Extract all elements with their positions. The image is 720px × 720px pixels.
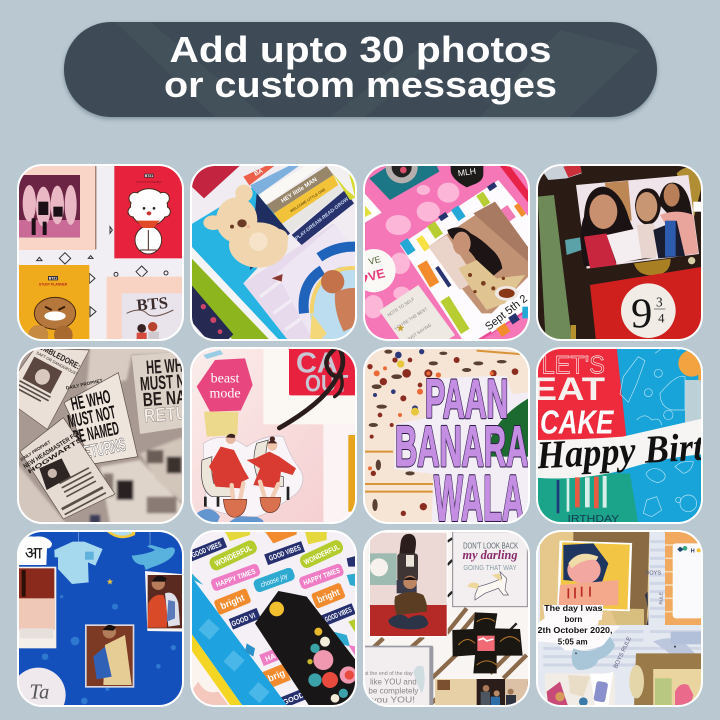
photo tile: Daily Prophet newspapers (17, 347, 184, 524)
title banner (62, 22, 659, 122)
photo tile: don't look back unicorn page: at the end of the day (365, 671, 413, 677)
photo tile: good vibes sticker sheet: brig (266, 668, 287, 684)
photo tile: teddy bear and baby stickers: WELCOME LITTLE ONE (289, 187, 327, 213)
photo tile: don't look back unicorn page: you YOU! (372, 694, 415, 704)
photo tile: Happy Birthday baby paper (536, 347, 703, 524)
photo tile: the day I was born page: born (564, 615, 582, 624)
photo tile: pink stickers with woman photo: ★ (396, 324, 405, 335)
photo tile: the day I was born page: RULE (659, 592, 664, 605)
photo tile: BTS planner stickers: BT21 (49, 277, 57, 281)
photo tile: Happy Birthday baby paper: LET'S (542, 351, 605, 379)
photo tile: teddy bear and baby stickers: BA (254, 168, 265, 178)
photo tile: Daily Prophet newspapers: DAILY PROPHET (19, 439, 52, 462)
photo tile: pink stickers with woman photo (363, 164, 530, 341)
photo tile: pink stickers with woman photo: VE (367, 254, 382, 267)
photo tile: beast mode sticker: mode (209, 386, 241, 401)
photo tile: Daily Prophet newspapers: MUST NOT (66, 401, 118, 432)
photo tile: good vibes sticker sheet: HAPPY TIMES (302, 566, 341, 587)
photo tile: don't look back unicorn page (363, 530, 530, 707)
photo tile: the day I was born page (536, 530, 703, 707)
photo tile: teddy bear and baby stickers: PLAY-DREAM-READ-GROW (294, 196, 350, 242)
photo tile: don't look back unicorn page: be completely (368, 685, 419, 695)
photo tile: Daily Prophet newspapers: HOGWARTS (27, 437, 84, 476)
photo tile: pink stickers with woman photo: NOTE TO SELF (386, 296, 416, 318)
photo tile: blue baby nursery page: Ta (29, 681, 49, 703)
photo tile: Daily Prophet newspapers: RETURNS (74, 433, 128, 464)
photo tile: Daily Prophet newspapers: DAILY PROPHET (65, 378, 103, 391)
photo tile: platform nine and three quarters (536, 164, 703, 341)
photo tile: platform nine and three quarters: 4 (658, 312, 665, 326)
photo tile: the day I was born page: 2th October 2020, (538, 626, 612, 635)
photo tile: Daily Prophet newspapers: HE WHO (69, 386, 112, 414)
photo tile: don't look back unicorn page: like YOU and (370, 676, 417, 686)
photo tile: Daily Prophet newspapers: NEW HEADMASTER FOR (22, 429, 83, 470)
photo tile: platform nine and three quarters: 9 (631, 290, 652, 337)
photo tile: the day I was born page: H (691, 548, 695, 554)
photo tile: good vibes sticker sheet (190, 530, 357, 707)
photo tile: teddy bear and baby stickers: HEY little MAN (280, 177, 319, 205)
photo tile: BTS planner stickers: BTS (136, 293, 169, 315)
photo tile: good vibes sticker sheet: choose joy (259, 571, 290, 589)
photo tile: pink stickers with woman photo: YOU'RE THE BEST (393, 306, 429, 331)
photo tile: beast mode sticker: OUT (305, 371, 349, 398)
photo tile: blue baby nursery page: ★ (106, 576, 114, 586)
title banner: or custom messages (164, 64, 557, 105)
photo tile: Daily Prophet newspapers: SAFT OR DANGEROUS? (35, 350, 79, 377)
photo tile: the day I was born page: BOYS RULE (613, 636, 633, 670)
photo tile: platform nine and three quarters: 3 (656, 295, 663, 310)
photo tile: good vibes sticker sheet: WONDERFUL (302, 542, 341, 567)
photo tile: the day I was born page: 5:05 am (558, 638, 588, 647)
photo tile: don't look back unicorn page: GOING THAT WAY (463, 563, 517, 572)
photo tile: teddy bear and baby stickers (190, 164, 357, 341)
photo tile: blue baby nursery page (17, 530, 184, 707)
photo tile: don't look back unicorn page: my darling (462, 548, 518, 562)
photo tile: BTS planner stickers: BT21 (145, 174, 153, 178)
photo tile: the day I was born page: BOYS (645, 570, 661, 576)
photo tile: pink stickers with woman photo: MLH (457, 166, 477, 178)
photo tile: good vibes sticker sheet: GOOD VIBES (268, 543, 302, 563)
photo tile: the day I was born page: The day I was (544, 604, 603, 613)
photo tile: Paan Banarasi Wala lettering (363, 347, 530, 524)
photo tile: BTS planner stickers: STUDY PLANNER (39, 283, 68, 287)
photo tile: good vibes sticker sheet: bright (316, 587, 341, 605)
photo tile: good vibes sticker sheet: GOOD VI (230, 611, 257, 628)
photo tile: good vibes sticker sheet: HA (264, 651, 278, 664)
title banner: Add upto 30 photos (170, 29, 552, 70)
photo tile: blue baby nursery page: आ (25, 543, 43, 562)
photo tile: BTS planner stickers: STUDY PLANNER (136, 180, 162, 184)
photo tile: good vibes sticker sheet: WONDERFUL (213, 543, 254, 568)
photo tile: Daily Prophet newspapers: BE NAMED (71, 417, 121, 447)
photo tile: beast mode sticker (190, 347, 357, 524)
photo tile: good vibes sticker sheet: bright (219, 593, 246, 611)
photo tile: BTS planner stickers (17, 164, 184, 341)
photo tile: Happy Birthday baby paper: CAKE (540, 404, 615, 441)
photo tile: good vibes sticker sheet: HAPPY TIMES (215, 566, 257, 589)
photo tile: beast mode sticker: beast (211, 372, 239, 387)
